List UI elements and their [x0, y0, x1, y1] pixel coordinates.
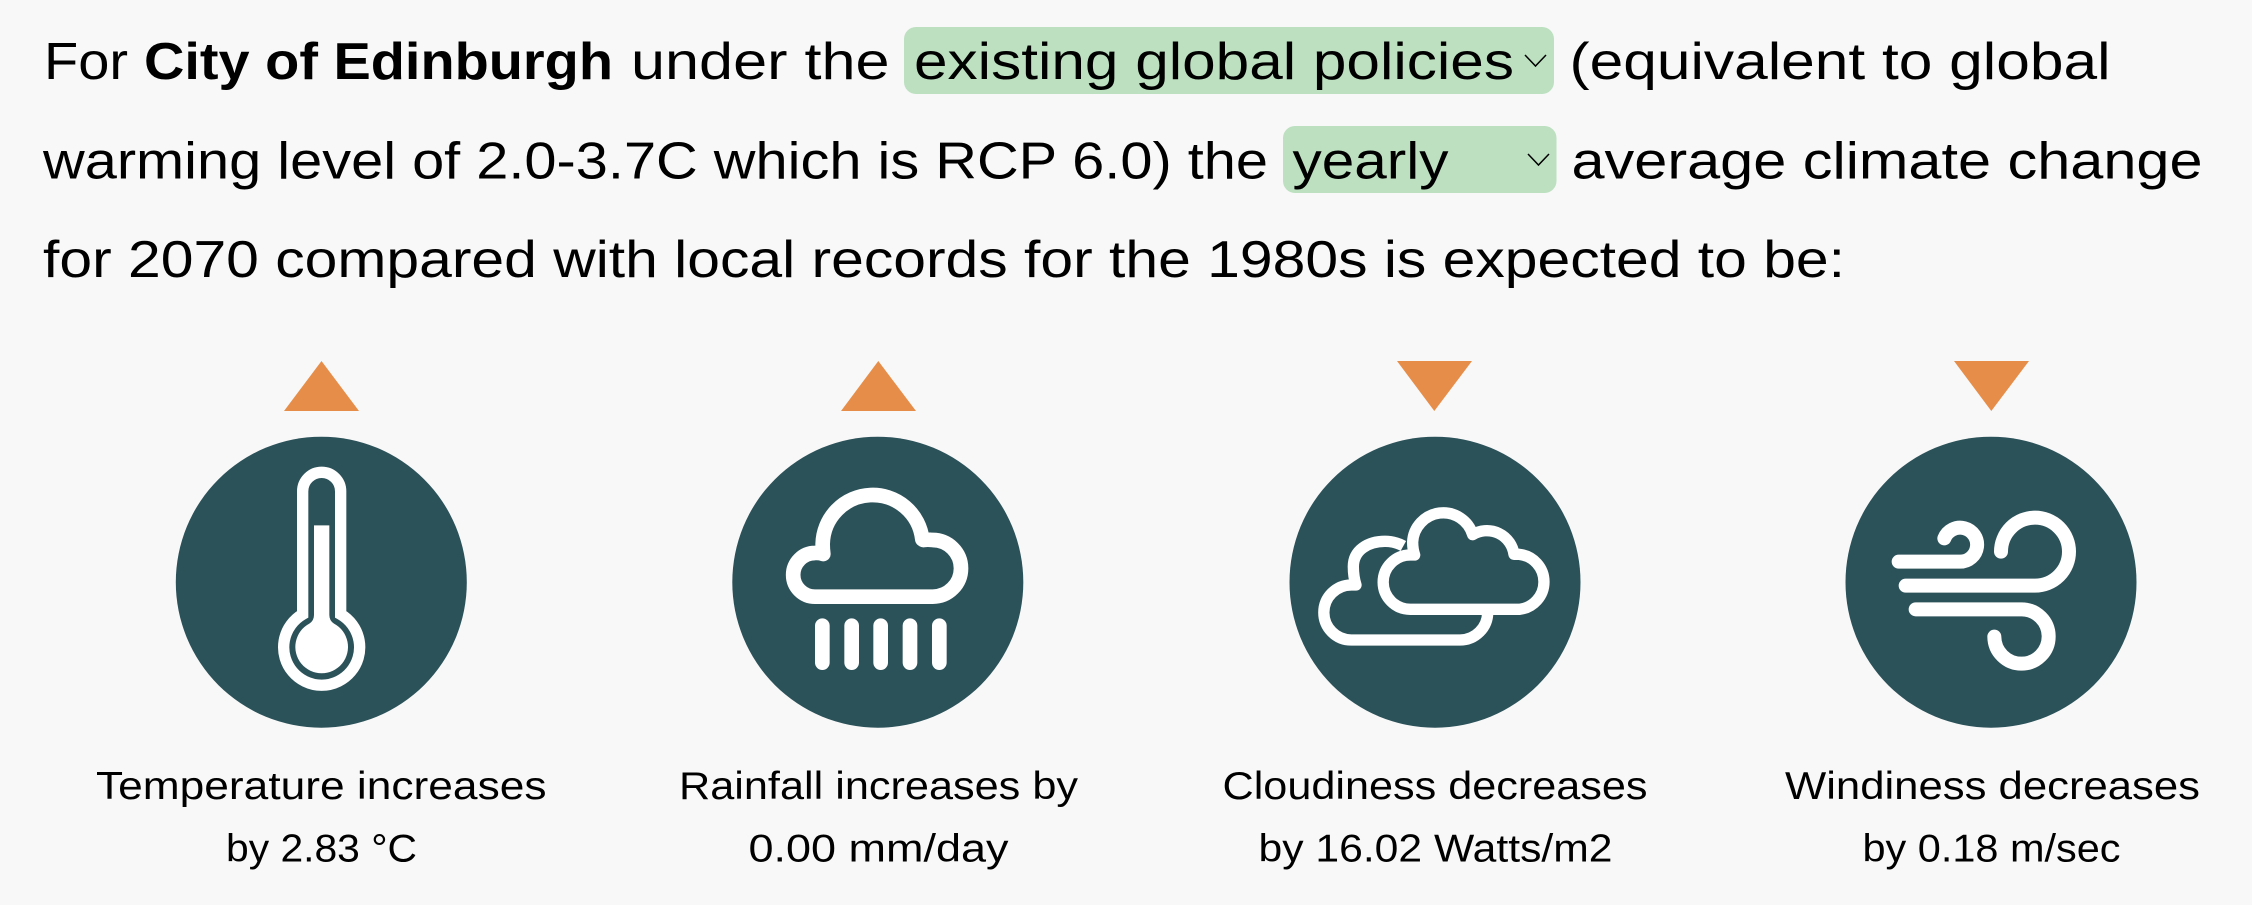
- caption: temperature: [96, 765, 546, 870]
- caption: temperature: by 2.83 °C: [226, 828, 417, 870]
- caption: windiness: [1785, 765, 2200, 870]
- arrow: down: [1397, 361, 1472, 411]
- caption: windiness: Windiness decreases: [1785, 765, 2200, 808]
- text line 1: [44, 33, 2110, 91]
- dropdown: yearly: yearly: [1292, 132, 1448, 190]
- arrow: up: [841, 361, 916, 411]
- caption: rainfall: 0.00 mm/day: [748, 828, 1009, 870]
- icon: wind: [1846, 437, 2136, 728]
- icon: rain cloud: [732, 437, 1023, 728]
- intro sentence: [42, 27, 2203, 289]
- caption: cloudiness: Cloudiness decreases: [1222, 765, 1648, 808]
- text line 1: For: [44, 33, 128, 91]
- icon: clouds: [1290, 437, 1580, 728]
- caption: temperature: Temperature increases: [96, 765, 546, 808]
- caption: rainfall: [679, 765, 1079, 870]
- arrow: down: [1954, 361, 2029, 411]
- caption: windiness: by 0.18 m/sec: [1862, 828, 2120, 870]
- panel: windiness: [1785, 361, 2200, 870]
- dropdown: yearly: [1283, 126, 1556, 193]
- panel: temperature: [96, 361, 546, 870]
- panel: rainfall: [679, 361, 1079, 870]
- dropdown: existing global policies: [904, 27, 1554, 94]
- text line 3: for 2070 compared with local records for the 1980s is expected to be:: [43, 231, 1845, 289]
- caption: rainfall: Rainfall increases by: [679, 765, 1079, 808]
- arrow: up: [284, 361, 359, 411]
- caption: cloudiness: [1222, 765, 1648, 870]
- dropdown: existing global policies: existing global policies: [914, 33, 1514, 91]
- text line 1: under the: [631, 33, 890, 91]
- text line 1: (equivalent to global: [1570, 33, 2110, 91]
- caption: cloudiness: by 16.02 Watts/m2: [1258, 828, 1612, 870]
- icon: thermometer: [176, 437, 467, 728]
- text line 2: average climate change: [1572, 132, 2202, 190]
- panel: cloudiness: [1222, 361, 1648, 870]
- text line 2: warming level of 2.0-3.7C which is RCP 6.0) the: [42, 132, 1268, 190]
- text line 2: [42, 132, 2203, 190]
- text line 1: City of Edinburgh: [144, 33, 613, 91]
